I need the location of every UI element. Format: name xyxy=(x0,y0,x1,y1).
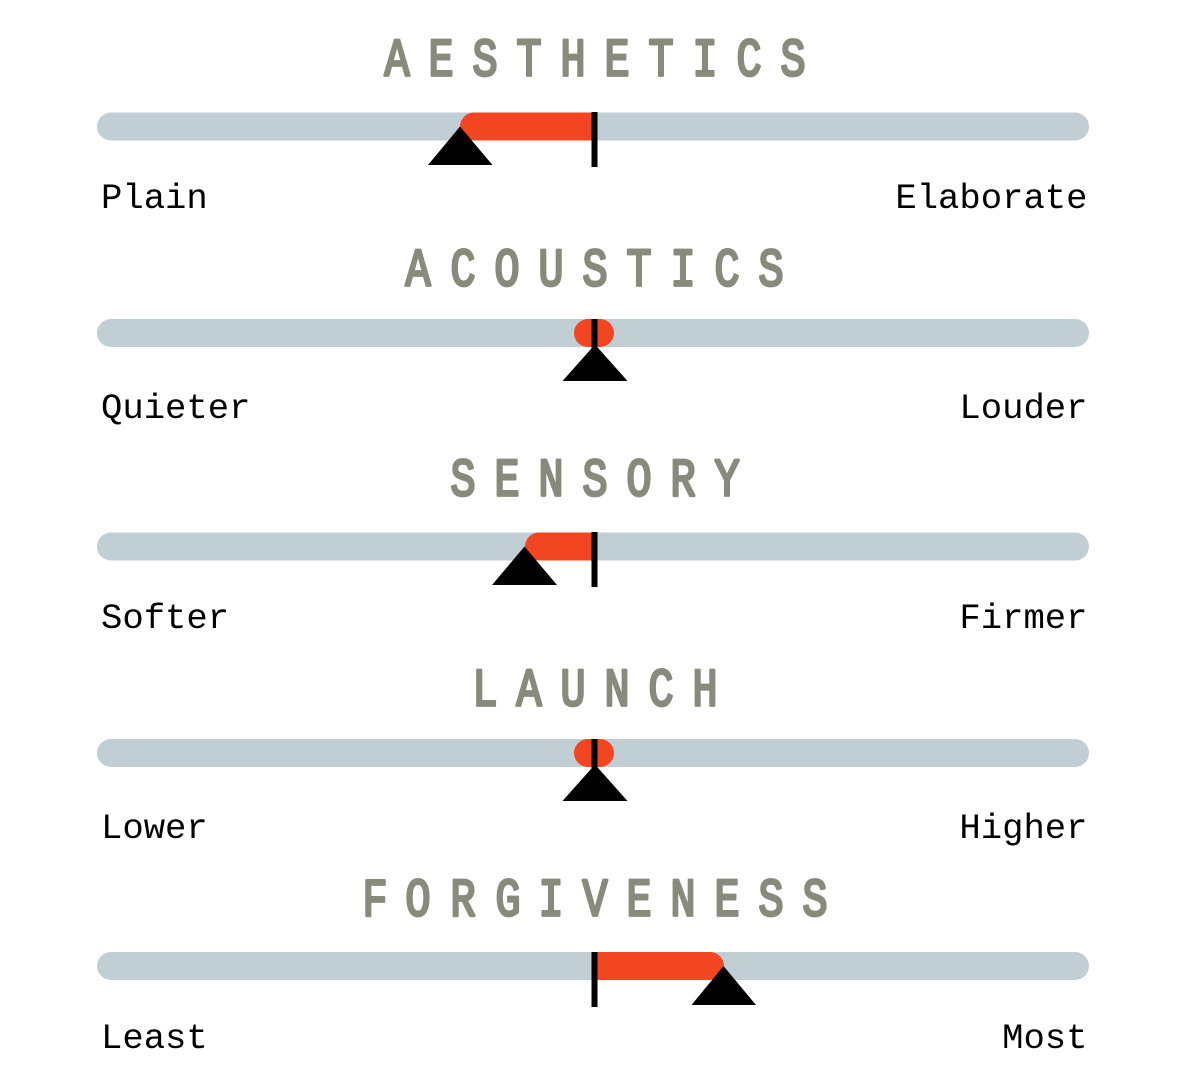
scale track: acoustics xyxy=(97,319,1089,347)
panel: forgiveness xyxy=(97,871,1089,1059)
marker triangle: acoustics xyxy=(562,344,628,381)
center tick: forgiveness xyxy=(592,952,598,1007)
heading: acoustics: ACOUSTICS xyxy=(405,241,784,302)
center tick: acoustics xyxy=(592,319,598,349)
heading: launch: LAUNCH xyxy=(472,661,718,722)
panel: aesthetics xyxy=(97,31,1089,219)
deviation bar: aesthetics xyxy=(460,112,592,140)
left label: least: Least xyxy=(101,1018,208,1059)
scale track: aesthetics xyxy=(97,112,1089,140)
heading: aesthetics: AESTHETICS xyxy=(384,31,806,92)
scale track: sensory xyxy=(97,532,1089,560)
left label: quieter: Quieter xyxy=(101,388,250,429)
right label: higher: Higher xyxy=(959,808,1088,849)
panel: acoustics xyxy=(97,241,1089,429)
marker triangle: forgiveness xyxy=(692,966,756,1005)
marker triangle: sensory xyxy=(492,546,557,585)
deviation bar: sensory xyxy=(525,532,592,560)
heading: sensory: SENSORY xyxy=(450,451,740,512)
left label: lower: Lower xyxy=(101,808,208,849)
center tick: sensory xyxy=(592,532,598,587)
left label: plain: Plain xyxy=(101,178,208,219)
deviation bar: acoustics xyxy=(574,319,614,347)
right label: louder: Louder xyxy=(959,388,1088,429)
scale track: launch xyxy=(97,739,1089,767)
panel: launch xyxy=(97,661,1089,849)
center tick: aesthetics xyxy=(592,112,598,167)
center tick: launch xyxy=(592,739,598,769)
right label: elaborate: Elaborate xyxy=(895,178,1088,219)
deviation bar: launch xyxy=(574,739,614,767)
marker triangle: launch xyxy=(562,764,628,801)
marker triangle: aesthetics xyxy=(428,126,492,165)
deviation bar: forgiveness xyxy=(595,952,724,980)
panel: sensory xyxy=(97,451,1089,639)
right label: most: Most xyxy=(1002,1018,1088,1059)
heading: forgiveness: FORGIVENESS xyxy=(362,871,828,932)
scale track: forgiveness xyxy=(97,952,1089,980)
left label: softer: Softer xyxy=(101,598,229,639)
right label: firmer: Firmer xyxy=(959,598,1088,639)
